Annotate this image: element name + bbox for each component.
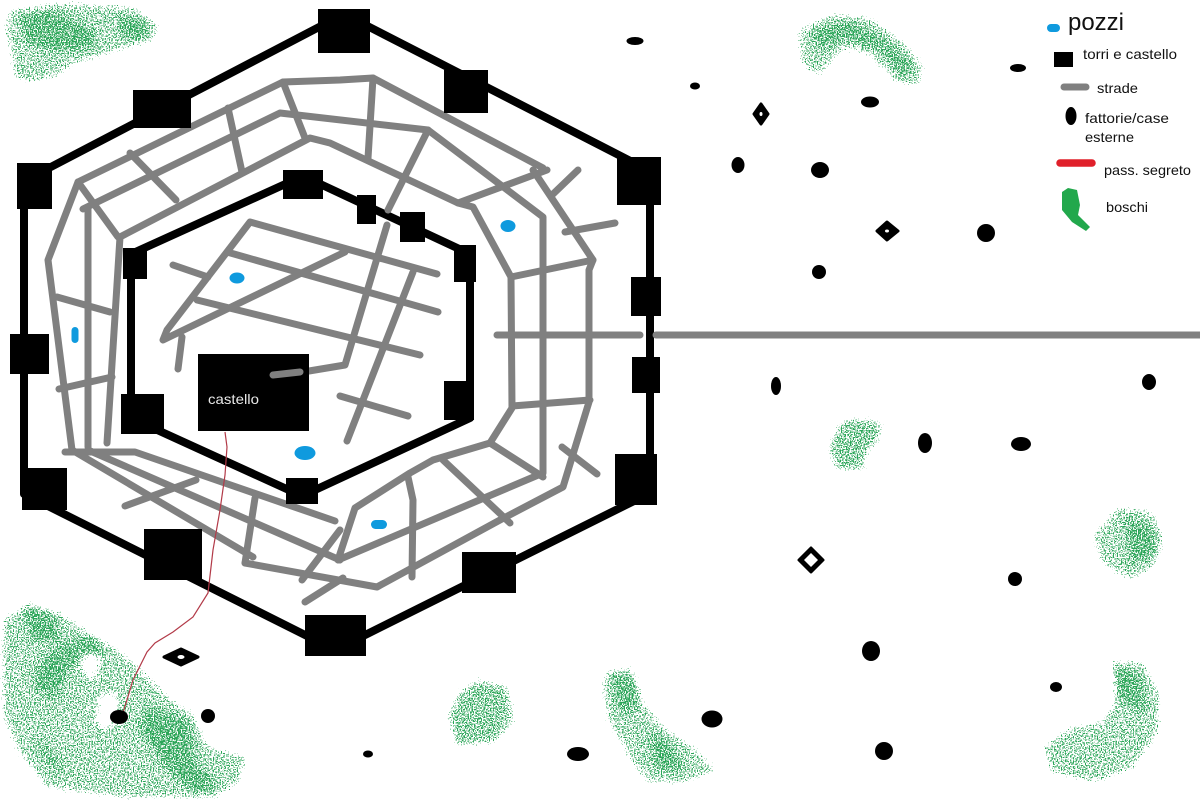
road: middle ring: [83, 113, 543, 560]
road: main road: [497, 332, 1200, 338]
forest: bottom centre: [600, 665, 720, 785]
forest: right: [1090, 504, 1167, 582]
forest: small bottom: [445, 677, 516, 748]
forest: bottom right: [1040, 658, 1163, 785]
secret passage: [123, 432, 227, 713]
legend: farms: fattorie/case: [1085, 110, 1169, 126]
forest: top left: [2, 0, 162, 85]
legend: farms: [1066, 107, 1169, 145]
legend: forests: [1062, 188, 1148, 231]
inner wall: [131, 176, 470, 496]
castle: [198, 354, 309, 431]
road: city streets: [163, 222, 438, 441]
legend: farms: esterne: [1085, 129, 1134, 145]
legend: roads: [1064, 80, 1138, 96]
legend: secret passage: [1060, 162, 1191, 178]
forest: bottom left: [0, 600, 250, 800]
legend: [1047, 9, 1191, 231]
towers outer: [10, 9, 661, 656]
roads: [48, 78, 1200, 602]
forest: centre right: [826, 415, 885, 472]
towers inner: [121, 170, 476, 504]
forest: top right: [795, 12, 925, 88]
farms: [110, 37, 1156, 761]
road: left lanes: [65, 209, 340, 560]
outer wall: [24, 14, 650, 650]
legend: towers and castle: torri e castello: [1083, 46, 1177, 62]
castle label: castello: [208, 391, 259, 407]
wells: [72, 220, 516, 529]
road: radial streets: [57, 78, 615, 602]
farm courtyards: [178, 112, 889, 659]
legend: forests: boschi: [1106, 199, 1148, 215]
legend: roads: strade: [1097, 80, 1138, 96]
legend: wells: pozzi: [1068, 9, 1124, 36]
road: outer ring: [48, 78, 593, 587]
legend: secret passage: pass. segreto: [1104, 162, 1191, 178]
legend: towers and castle: [1054, 46, 1177, 67]
